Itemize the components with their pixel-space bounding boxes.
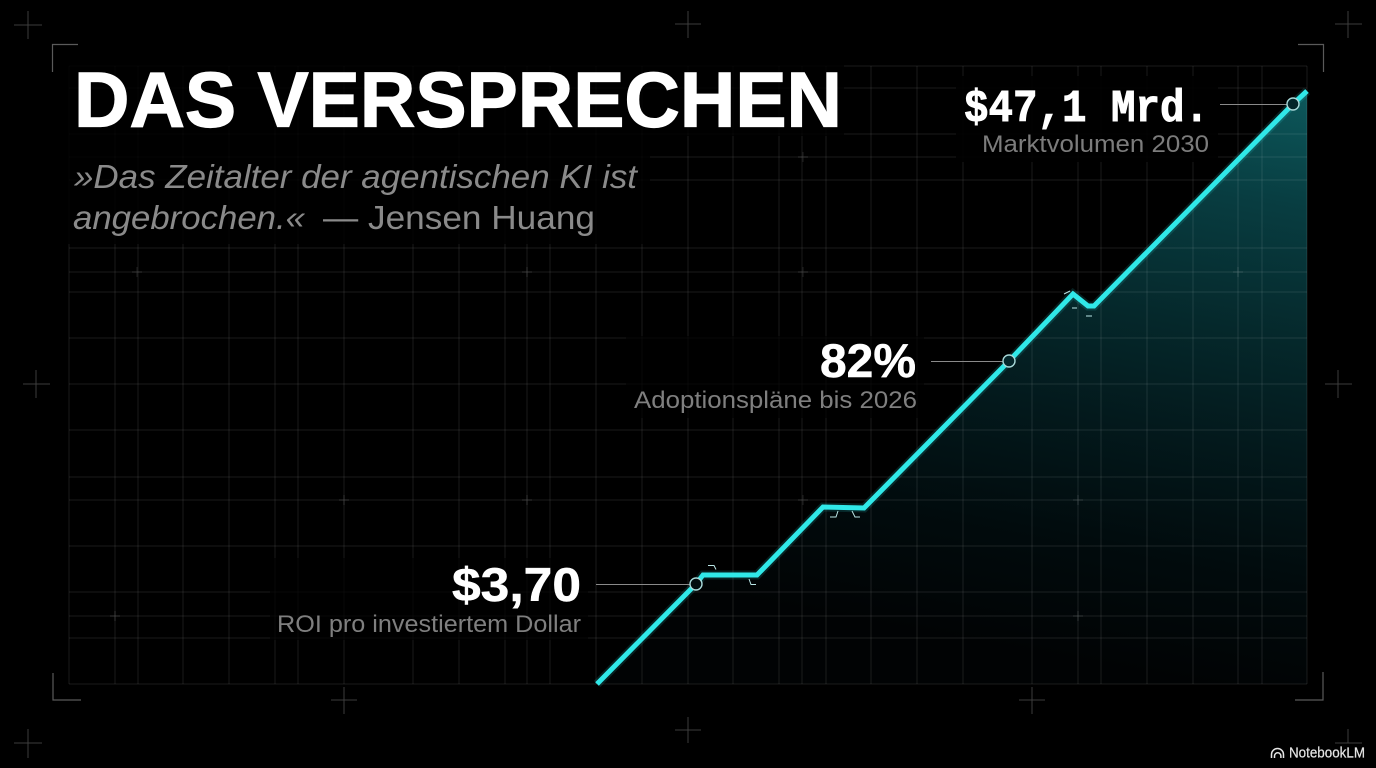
- caption: Marktvolumen 2030: [982, 131, 1209, 158]
- caption: ROI pro investiertem Dollar: [277, 611, 581, 638]
- quote: [73, 158, 639, 236]
- callout: market volume: [964, 84, 1299, 158]
- caption: Adoptionspläne bis 2026: [634, 387, 917, 414]
- marker: [1003, 355, 1015, 367]
- watermark: NotebookLM: [1272, 746, 1365, 762]
- icon: notebook arcs: [1272, 748, 1284, 758]
- title: DAS VERSPRECHEN: [74, 56, 842, 144]
- marker: [690, 578, 702, 590]
- value: $47,1 Mrd.: [964, 84, 1209, 135]
- quote attribution: — Jensen Huang: [323, 199, 595, 236]
- leader line: [1220, 104, 1287, 106]
- quote line two: angebrochen.«: [73, 199, 306, 236]
- corner brackets: [52, 44, 1324, 700]
- value: $3,70: [452, 558, 581, 611]
- quote line one: »Das Zeitalter der agentischen KI ist: [74, 158, 639, 195]
- callout: ROI: [277, 558, 702, 638]
- leader line: [931, 360, 1003, 362]
- marker: [1287, 98, 1299, 110]
- glitch tick marks on curve: [708, 291, 1092, 584]
- callout: adoption: [634, 334, 1015, 414]
- leader line: [596, 584, 690, 586]
- area under growth curve: [597, 91, 1307, 684]
- growth curve: [597, 91, 1307, 684]
- value: 82%: [820, 334, 916, 387]
- wordmark: NotebookLM: [1289, 746, 1365, 762]
